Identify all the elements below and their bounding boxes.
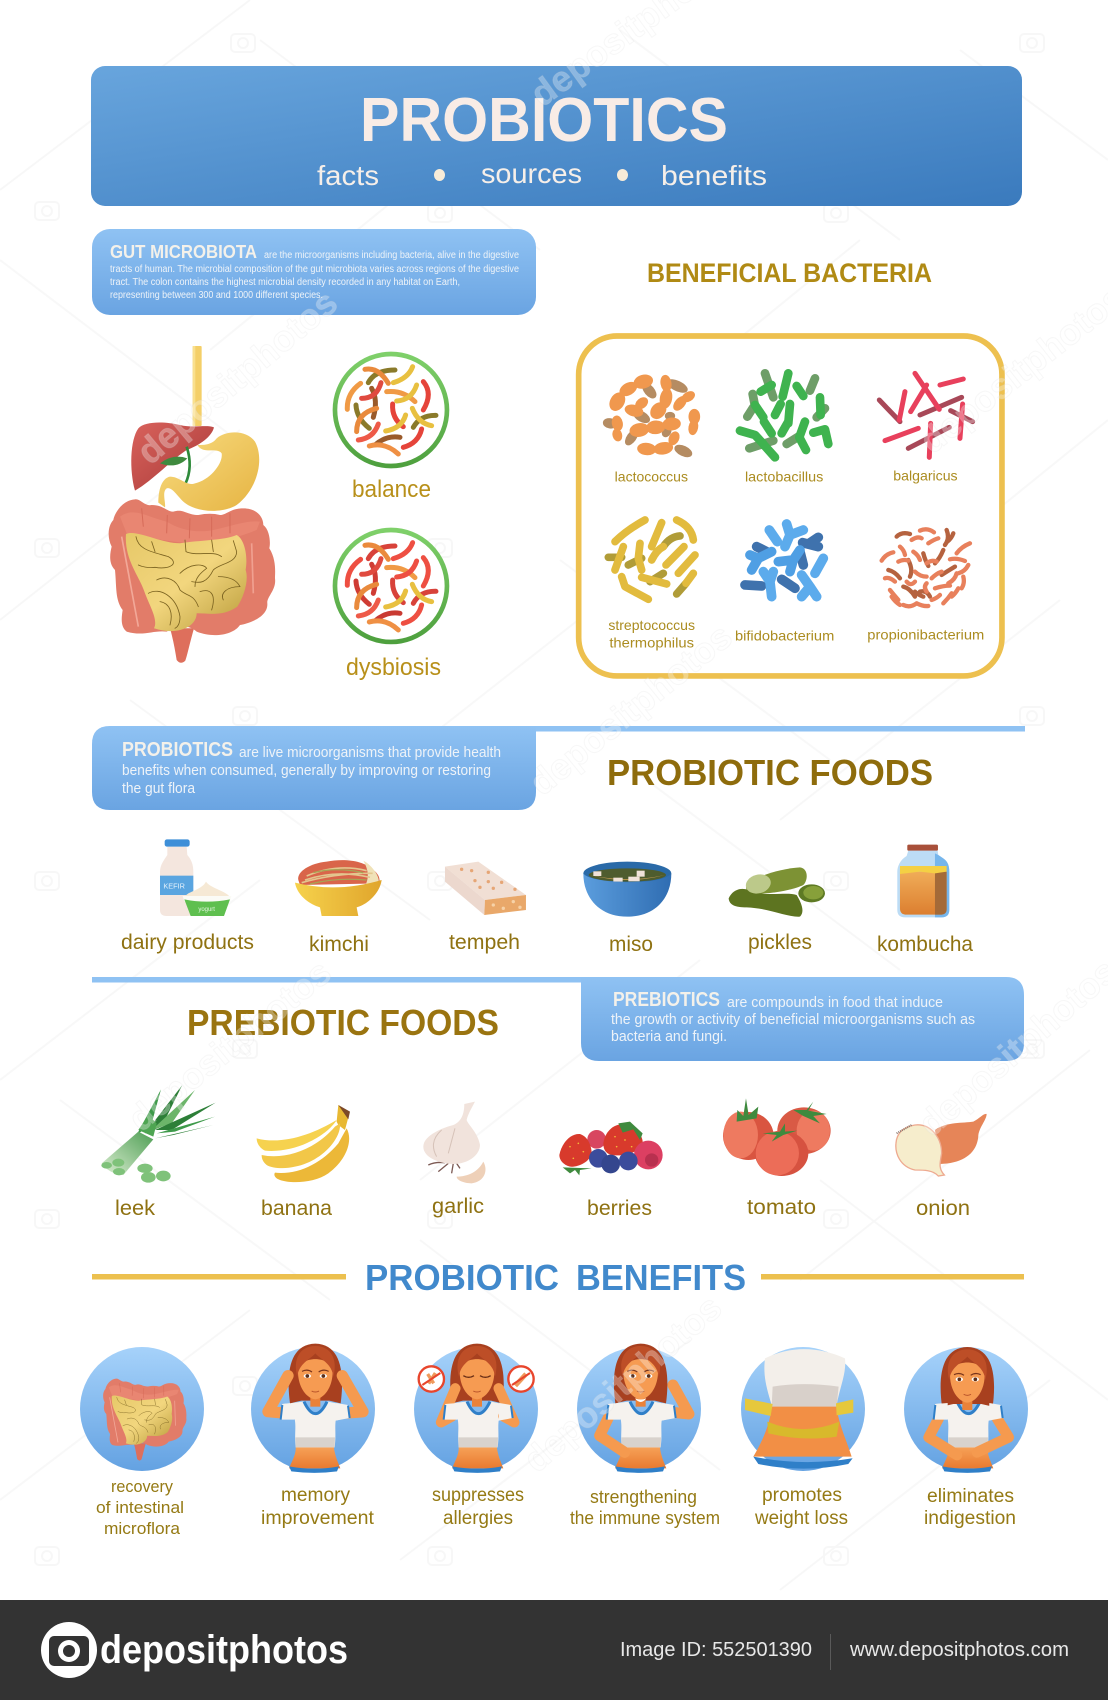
icon: berries (559, 1122, 663, 1175)
allergy ban icon right (508, 1366, 534, 1392)
heading: probiotic benefits: PROBIOTIC (365, 1257, 559, 1298)
bacteria: propionibacterium (882, 529, 970, 606)
label: promotes (762, 1485, 842, 1506)
title: PROBIOTICS (360, 86, 728, 155)
bacteria: balgaricus (879, 373, 973, 457)
benefit: eliminates indigestion (904, 1347, 1028, 1529)
woman flexing arm (600, 1344, 689, 1473)
label: dairy products: dairy products (121, 931, 254, 954)
heading: beneficial bacteria: BENEFICIAL BACTERIA (647, 258, 932, 288)
label: improvement (261, 1508, 375, 1529)
heading: PREBIOTICS (613, 989, 720, 1011)
benefit: strengthening the immune system (570, 1344, 720, 1528)
icon: tomato (723, 1098, 831, 1176)
label: garlic: garlic (432, 1195, 484, 1218)
website: www.depositphotos.com (849, 1639, 1069, 1661)
label: suppresses (432, 1485, 524, 1506)
icon: dairy products: KEFIR (163, 881, 185, 890)
balance microbiota circle (335, 354, 447, 466)
label: strengthening (590, 1487, 697, 1507)
label: memory (281, 1485, 350, 1506)
heading: gut microbiota: GUT MICROBIOTA (110, 242, 257, 262)
bacteria: bifidobacterium (745, 524, 823, 597)
definition text: bacteria and fungi. (611, 1028, 727, 1045)
label: bifidobacterium (735, 628, 834, 644)
definition text: tracts of human. The microbial composition of the gut microbiota varies across regions of the digestive (110, 264, 519, 275)
bullet (434, 169, 445, 181)
title banner (91, 66, 1022, 206)
icon: garlic (423, 1102, 486, 1183)
icon: tempeh (445, 862, 526, 915)
label: streptococcus (608, 617, 695, 633)
divider: benefits left (92, 1274, 346, 1280)
label (754, 1485, 848, 1529)
subtitle: benefits: benefits (661, 160, 767, 191)
benefit: recovery of intestinal microflora (80, 1347, 204, 1538)
icon: dairy products: yogurt (198, 907, 215, 913)
definition text: benefits when consumed, generally by improving or restoring (122, 762, 491, 779)
label: balance: balance (352, 476, 431, 503)
label (261, 1485, 375, 1529)
definition text: are the microorganisms including bacteria, alive in the digestive (264, 250, 519, 261)
label: of intestinal (96, 1498, 184, 1517)
watermark: depositphotos (120, 951, 339, 1139)
icon: intestine (103, 1379, 186, 1460)
label: weight loss (754, 1508, 848, 1529)
label: berries: berries (587, 1197, 652, 1220)
bullet (617, 169, 628, 181)
panel: prebiotics definition (92, 977, 1024, 1061)
label: onion: onion (916, 1197, 970, 1220)
definition text: are live microorganisms that provide health (239, 744, 501, 761)
icon: onion (896, 1114, 987, 1176)
benefit: promotes weight loss (741, 1347, 865, 1529)
heading: PROBIOTICS (122, 739, 233, 761)
image id: Image ID: 552501390 (620, 1639, 812, 1661)
label: banana: banana (261, 1197, 332, 1220)
subtitle: sources: sources (481, 158, 582, 189)
label: dysbiosis: dysbiosis (346, 654, 441, 681)
watermark: depositphotos (515, 1286, 729, 1480)
watermark (120, 0, 1108, 1480)
label: miso: miso (609, 933, 653, 956)
logo icon: camera (41, 1622, 97, 1678)
label: propionibacterium (867, 626, 984, 642)
label: microflora (104, 1519, 181, 1538)
label: pickles: pickles (748, 931, 812, 954)
definition text (611, 994, 975, 1045)
benefit: memory improvement (251, 1344, 375, 1529)
icon: dairy products (160, 839, 231, 916)
logo wordmark: depositphotos (100, 1628, 348, 1672)
definition text: are compounds in food that induce (727, 994, 943, 1011)
watermark: depositphotos (129, 281, 345, 472)
label: thermophilus (609, 635, 694, 651)
bacteria: streptococcus thermophilus (608, 520, 695, 599)
label: eliminates (927, 1486, 1014, 1507)
bacteria: lactococcus (603, 374, 699, 458)
label (570, 1487, 720, 1528)
icon: leek (101, 1085, 216, 1183)
watermark: depositphotos (521, 615, 740, 803)
label (924, 1486, 1016, 1529)
definition text (110, 250, 519, 301)
footer bar (0, 1600, 1108, 1700)
benefit: suppresses allergies (414, 1344, 538, 1529)
label (432, 1485, 524, 1529)
illustration: digestive system (109, 346, 275, 663)
bacteria: lactobacillus (740, 373, 828, 457)
panel: gut microbiota definition (92, 229, 536, 315)
panel: probiotics definition (92, 726, 1025, 810)
definition text: the gut flora (122, 780, 196, 797)
label: leek: leek (115, 1197, 156, 1220)
label: lactobacillus (745, 469, 823, 485)
woman holding stomach (929, 1347, 1009, 1473)
label: kimchi: kimchi (309, 933, 369, 956)
definition text: representing between 300 and 1000 different species. (110, 290, 323, 301)
divider: benefits right (761, 1274, 1024, 1280)
heading: prebiotic foods: PREBIOTIC FOODS (187, 1002, 499, 1043)
heading: probiotic benefits: BENEFITS (576, 1257, 746, 1298)
definition text: tract. The colon contains the highest microbial density recorded in any habitat on Earth, (110, 277, 460, 288)
label: indigestion (924, 1508, 1016, 1529)
woman touching temples (268, 1344, 363, 1473)
label: kombucha: kombucha (877, 933, 973, 956)
label: recovery (111, 1477, 173, 1496)
label: tempeh: tempeh (449, 931, 520, 954)
subtitle: facts: facts (317, 160, 379, 191)
label: the immune system (570, 1508, 720, 1528)
icon: banana (257, 1105, 350, 1182)
heading: probiotic benefits (365, 1257, 746, 1298)
definition text (122, 744, 501, 797)
icon: pickles (729, 867, 825, 917)
label (96, 1477, 184, 1538)
allergy ban icon left (419, 1366, 444, 1392)
woman covering ears (419, 1344, 534, 1473)
label: allergies (443, 1508, 513, 1529)
icon: kombucha (897, 845, 949, 917)
label: lactococcus (615, 469, 688, 485)
heading: probiotic foods: PROBIOTIC FOODS (607, 752, 933, 793)
icon: kimchi (295, 860, 382, 916)
icon: miso (583, 862, 671, 917)
definition text: the growth or activity of beneficial microorganisms such as (611, 1011, 975, 1028)
torso with measuring tape (745, 1349, 853, 1469)
panel: beneficial bacteria (579, 336, 1002, 676)
label: balgaricus (893, 467, 958, 483)
label: tomato: tomato (747, 1196, 816, 1219)
dysbiosis microbiota circle (335, 530, 447, 642)
